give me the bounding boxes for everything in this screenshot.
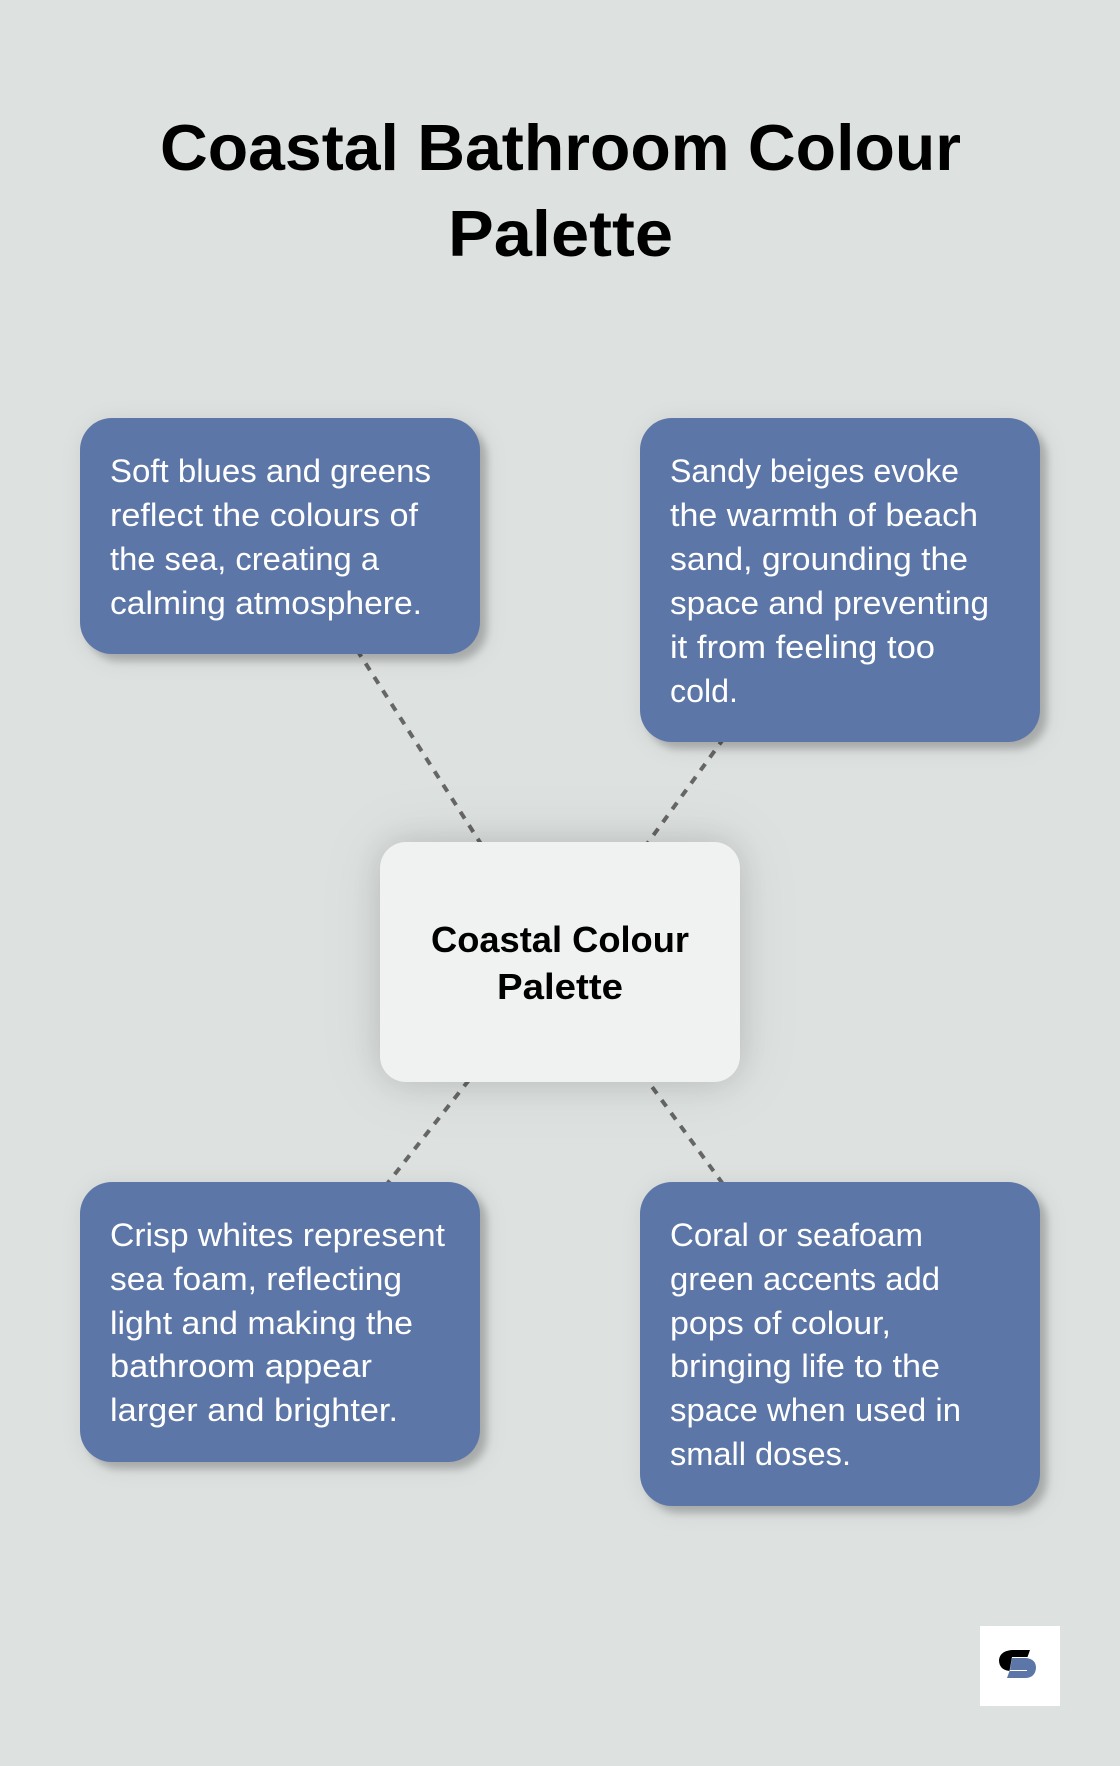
logo badge <box>980 1626 1060 1706</box>
card: crisp whites: sea foam, reflecting <box>110 1261 402 1297</box>
card: coral or seafoam accents: space when used in <box>670 1392 961 1428</box>
card: sandy beiges <box>640 418 1040 742</box>
centre node: coastal colour palette: Palette <box>497 966 623 1007</box>
card: sandy beiges: Sandy beiges evoke <box>670 453 959 489</box>
card: soft blues and greens: reflect the colours of <box>110 497 418 533</box>
title: Palette <box>448 197 673 270</box>
card: crisp whites: Crisp whites represent <box>110 1217 445 1253</box>
card: coral or seafoam accents: green accents add <box>670 1261 940 1297</box>
card: coral or seafoam accents: bringing life to the <box>670 1348 940 1384</box>
card: soft blues and greens: calming atmosphere. <box>110 585 422 621</box>
card: soft blues and greens <box>80 418 480 654</box>
card: sandy beiges: the warmth of beach <box>670 497 978 533</box>
card: coral or seafoam accents: small doses. <box>670 1436 851 1472</box>
card: coral or seafoam accents <box>640 1182 1040 1506</box>
card: soft blues and greens: the sea, creating a <box>110 541 379 577</box>
card: soft blues and greens: Soft blues and greens <box>110 453 431 489</box>
card: sandy beiges: it from feeling too <box>670 629 935 665</box>
card: crisp whites: larger and brighter. <box>110 1392 398 1428</box>
card: sandy beiges: space and preventing <box>670 585 989 621</box>
card: crisp whites: light and making the <box>110 1305 413 1341</box>
title: Coastal Bathroom Colour <box>160 111 961 184</box>
card: crisp whites: bathroom appear <box>110 1348 372 1384</box>
card: sandy beiges: sand, grounding the <box>670 541 968 577</box>
centre node: coastal colour palette <box>380 842 740 1082</box>
card: coral or seafoam accents: pops of colour, <box>670 1305 891 1341</box>
card: sandy beiges: cold. <box>670 673 738 709</box>
card: coral or seafoam accents: Coral or seafoam <box>670 1217 923 1253</box>
centre node: coastal colour palette: Coastal Colour <box>431 919 689 960</box>
title <box>160 111 961 270</box>
card: crisp whites <box>80 1182 480 1462</box>
connectors between the centre node and the cards <box>357 650 724 1184</box>
